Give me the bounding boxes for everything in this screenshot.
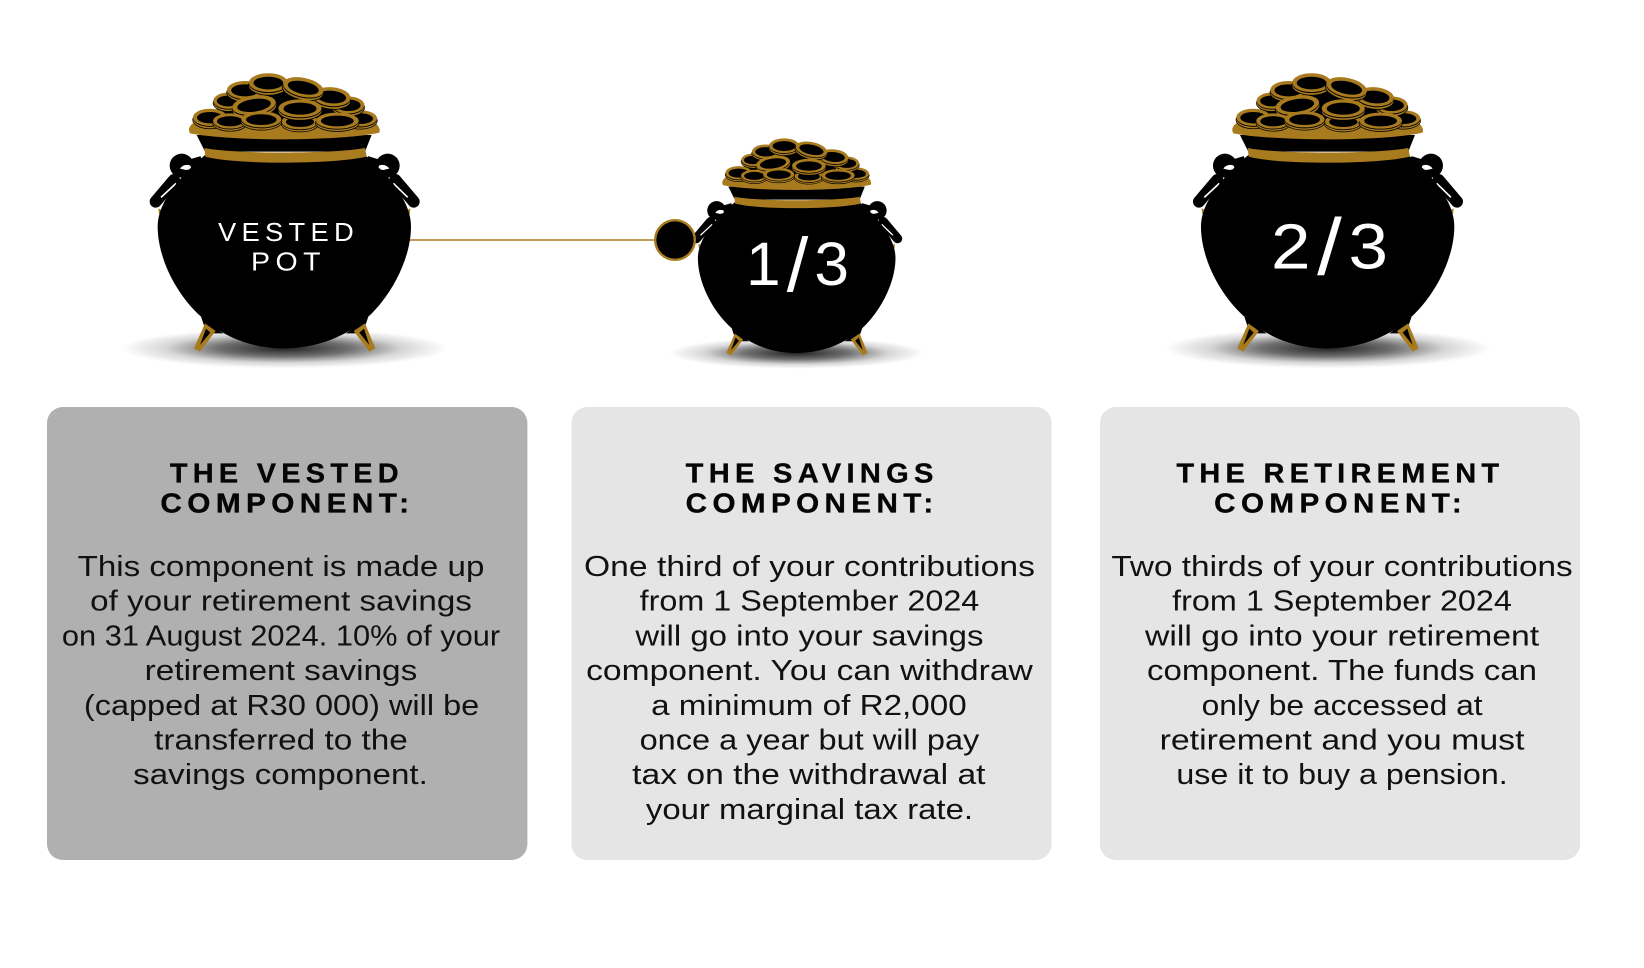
text: vested component body: savings component.: [133, 759, 428, 791]
retirement pot label: 2: [1271, 210, 1307, 282]
heading: vested component: THE VESTED: [170, 458, 404, 489]
text: savings component body: tax on the withdrawal at: [632, 759, 986, 791]
text: retirement component body: will go into your retirement: [1144, 620, 1539, 652]
heading: vested component: [160, 458, 414, 519]
panel: vested component: [47, 407, 527, 860]
text: retirement component body: only be accessed at: [1202, 690, 1483, 722]
savings pot label: /: [787, 223, 809, 308]
panel: savings component: [571, 407, 1052, 860]
savings pot label: 3: [814, 230, 849, 298]
text: retirement component body: use it to buy a pension.: [1176, 759, 1508, 791]
vested pot label: POT: [251, 247, 326, 277]
text: retirement component body: retirement and you must: [1160, 724, 1524, 756]
text: retirement component body: from 1 September 2024: [1172, 586, 1512, 618]
text: savings component body: component. You can withdraw: [586, 655, 1034, 687]
connector node circle: [655, 220, 695, 260]
text: savings component body: [584, 551, 1035, 826]
icon: savings pot of coins: [669, 138, 924, 369]
icon: retirement pot of coins: [1164, 73, 1491, 368]
text: savings component body: One third of your contributions: [584, 551, 1035, 583]
heading: retirement component: COMPONENT:: [1214, 488, 1467, 519]
text: vested component body: (capped at R30 000) will be: [84, 690, 479, 722]
heading: savings component: COMPONENT:: [686, 488, 939, 519]
text: retirement component body: component. The funds can: [1147, 655, 1537, 687]
heading: savings component: THE SAVINGS: [686, 458, 939, 489]
text: savings component body: from 1 September 2024: [640, 586, 979, 618]
vested pot label: [218, 217, 359, 277]
heading: vested component: COMPONENT:: [160, 488, 414, 519]
retirement pot label: /: [1317, 202, 1343, 291]
text: retirement component body: Two thirds of your contributions: [1111, 551, 1573, 583]
text: savings component body: once a year but will pay: [640, 724, 980, 756]
heading: savings component: [686, 458, 939, 519]
vested pot label: VESTED: [218, 217, 359, 247]
text: vested component body: This component is made up: [78, 551, 484, 583]
retirement pot label: 3: [1348, 210, 1388, 282]
text: vested component body: of your retirement savings: [90, 586, 472, 618]
text: savings component body: your marginal tax rate.: [646, 794, 973, 826]
icon: vested pot of coins: [121, 73, 448, 368]
panel: retirement component: [1100, 407, 1580, 860]
text: vested component body: [62, 551, 501, 791]
heading: retirement component: [1176, 458, 1504, 519]
text: savings component body: will go into your savings: [634, 620, 984, 652]
savings pot label: 1: [746, 230, 780, 298]
text: savings component body: a minimum of R2,000: [651, 690, 967, 722]
connector line from vested pot to savings pot: [410, 239, 656, 241]
text: vested component body: retirement savings: [145, 655, 417, 687]
heading: retirement component: THE RETIREMENT: [1176, 458, 1504, 489]
text: vested component body: on 31 August 2024. 10% of your: [62, 620, 501, 652]
text: vested component body: transferred to the: [154, 724, 408, 756]
text: retirement component body: [1111, 551, 1573, 791]
